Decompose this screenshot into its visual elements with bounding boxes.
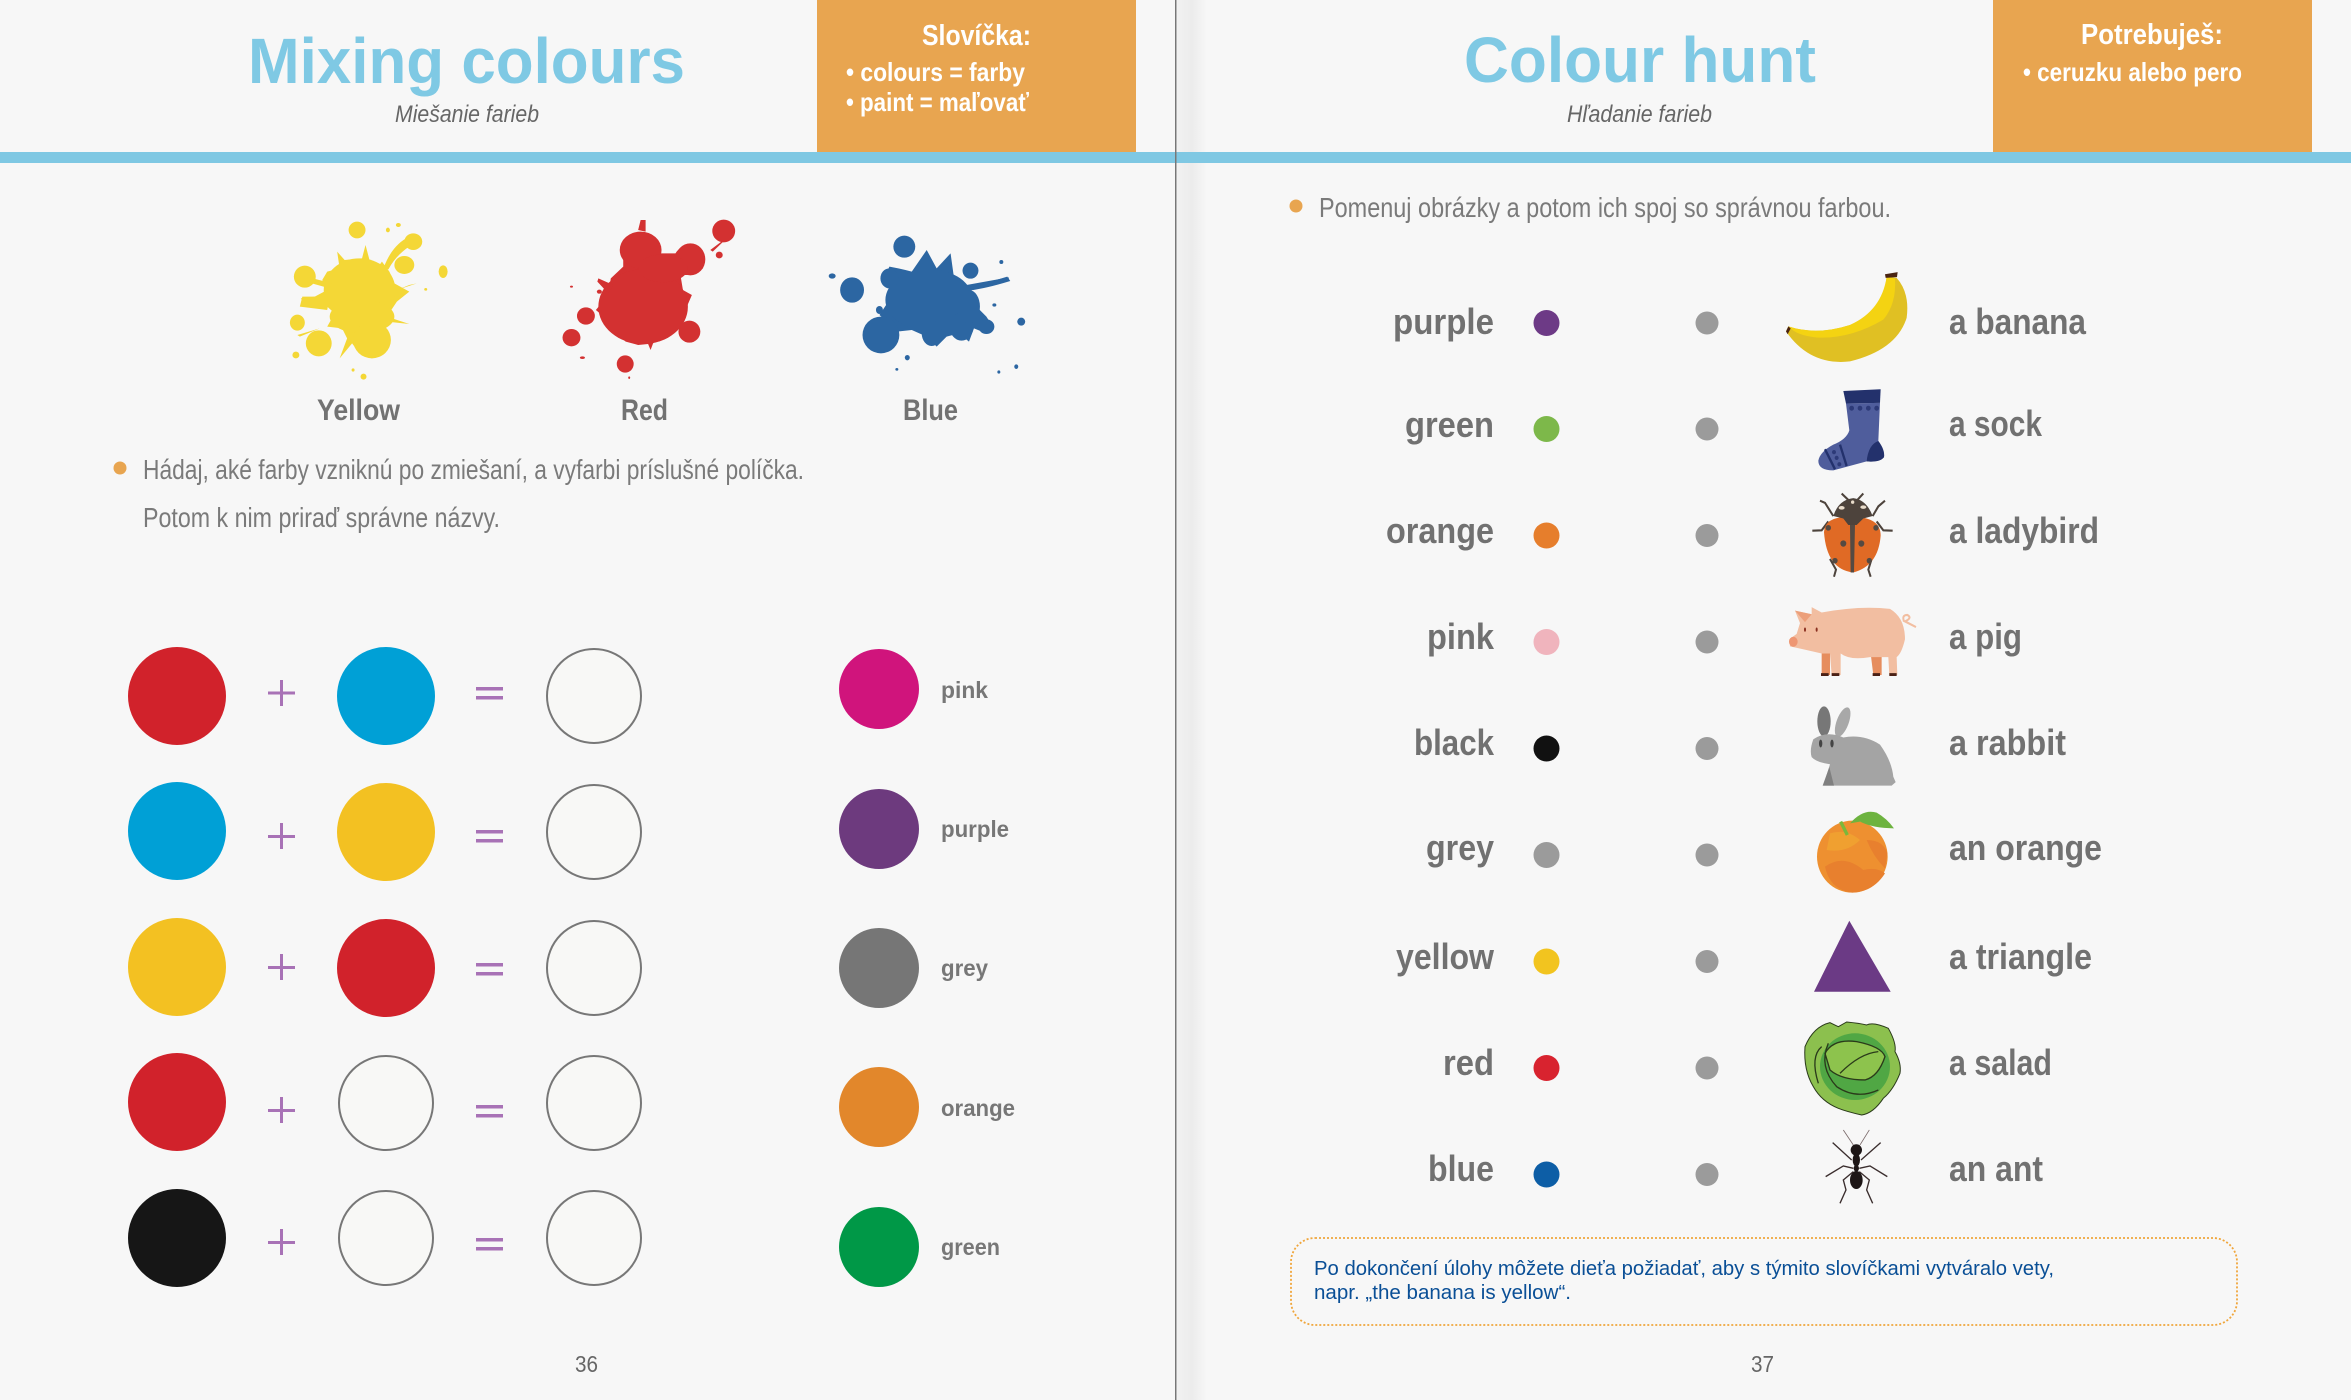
swatch: grey: grey — [941, 955, 988, 981]
icon: sock — [1818, 389, 1884, 470]
icon: pig — [1789, 607, 1916, 676]
icon: triangle — [1814, 921, 1891, 992]
icon: blue splat — [829, 236, 1025, 374]
row: grey: grey — [1426, 827, 1494, 868]
swatch: pink — [839, 649, 988, 729]
colour words and dots — [1386, 301, 1718, 1189]
row: green — [1405, 404, 1718, 445]
icon: rabbit — [1811, 705, 1896, 786]
label: Blue: Blue — [903, 394, 958, 427]
instruction text — [114, 454, 804, 533]
label: Yellow: Yellow — [317, 394, 401, 427]
row: grey — [1426, 827, 1718, 868]
subtitle: Miešanie farieb — [395, 101, 539, 128]
icon: ladybird — [1812, 494, 1893, 577]
vocabulary box: • colours = farby — [846, 57, 1025, 87]
vocabulary box: • paint = maľovať — [846, 87, 1029, 117]
row: black — [1414, 722, 1718, 763]
icon: ant — [1826, 1130, 1887, 1203]
instruction text: Potom k nim priraď správne názvy. — [143, 502, 500, 533]
instruction text: Pomenuj obrázky a potom ich spoj so správnou farbou. — [1319, 192, 1891, 223]
title: Colour hunt: Colour hunt — [1464, 24, 1816, 96]
icon: red splat — [563, 220, 735, 379]
row: red: red — [1443, 1042, 1494, 1083]
callout: parent note: napr. „the banana is yellow“. — [1314, 1282, 1571, 1304]
callout: parent note — [1291, 1238, 2237, 1325]
equation row 3 — [128, 918, 641, 1017]
swatch: grey — [839, 928, 988, 1008]
label: a ladybird: a ladybird — [1949, 510, 2099, 551]
swatch: orange — [839, 1067, 1015, 1147]
swatch: green — [839, 1207, 1000, 1287]
icon: salad — [1805, 1022, 1900, 1115]
panel: left page — [114, 0, 1136, 1377]
swatch: purple: purple — [941, 816, 1009, 842]
row: orange — [1386, 510, 1718, 551]
supplies box: Potrebuješ: — [2081, 19, 2223, 51]
row: yellow: yellow — [1396, 936, 1495, 977]
swatch: orange: orange — [941, 1095, 1015, 1121]
title: Mixing colours: Mixing colours — [248, 25, 685, 97]
equation row 5 — [128, 1189, 641, 1287]
label: a banana: a banana — [1949, 301, 2087, 342]
label: an orange: an orange — [1949, 827, 2102, 868]
equation row 2 — [128, 782, 641, 881]
icon: yellow splat — [290, 222, 448, 380]
label: a salad: a salad — [1949, 1042, 2052, 1083]
instruction text: Hádaj, aké farby vzniknú po zmiešaní, a vyfarbi príslušné políčka. — [143, 454, 804, 485]
swatch: purple — [839, 789, 1009, 869]
row: yellow — [1396, 936, 1718, 977]
callout: parent note: Po dokončení úlohy môžete dieťa požiadať, aby s týmito slovíčkami vytváralo vety, — [1314, 1258, 2054, 1280]
swatch: green: green — [941, 1234, 1000, 1260]
header band — [0, 152, 2351, 163]
row: purple: purple — [1393, 301, 1494, 342]
vocabulary box — [817, 0, 1136, 152]
swatch: pink: pink — [941, 677, 988, 703]
row: green: green — [1405, 404, 1494, 445]
panel: right page — [1290, 0, 2312, 1377]
label: a pig: a pig — [1949, 616, 2022, 657]
supplies box — [1993, 0, 2312, 152]
label: Red: Red — [621, 394, 668, 427]
row: blue — [1428, 1148, 1718, 1189]
row: blue: blue — [1428, 1148, 1494, 1189]
page number 37: 37 — [1751, 1351, 1774, 1377]
row: black: black — [1414, 722, 1495, 763]
vocabulary box: Slovíčka: — [922, 20, 1031, 52]
row: purple — [1393, 301, 1718, 342]
equation row 1 — [128, 647, 641, 745]
label: an ant: an ant — [1949, 1148, 2043, 1189]
page number 36: 36 — [575, 1351, 598, 1377]
object labels — [1949, 301, 2102, 1189]
icon: orange — [1817, 812, 1894, 893]
label: a sock: a sock — [1949, 403, 2043, 444]
label: a rabbit: a rabbit — [1949, 722, 2066, 763]
row: pink — [1427, 616, 1718, 657]
subtitle: Hľadanie farieb — [1567, 101, 1712, 128]
row: pink: pink — [1427, 616, 1495, 657]
icon: banana — [1786, 272, 1907, 362]
label: a triangle: a triangle — [1949, 936, 2092, 977]
row: red — [1443, 1042, 1718, 1083]
row: orange: orange — [1386, 510, 1494, 551]
supplies box: • ceruzku alebo pero — [2023, 57, 2242, 87]
equation row 4 — [128, 1053, 641, 1151]
